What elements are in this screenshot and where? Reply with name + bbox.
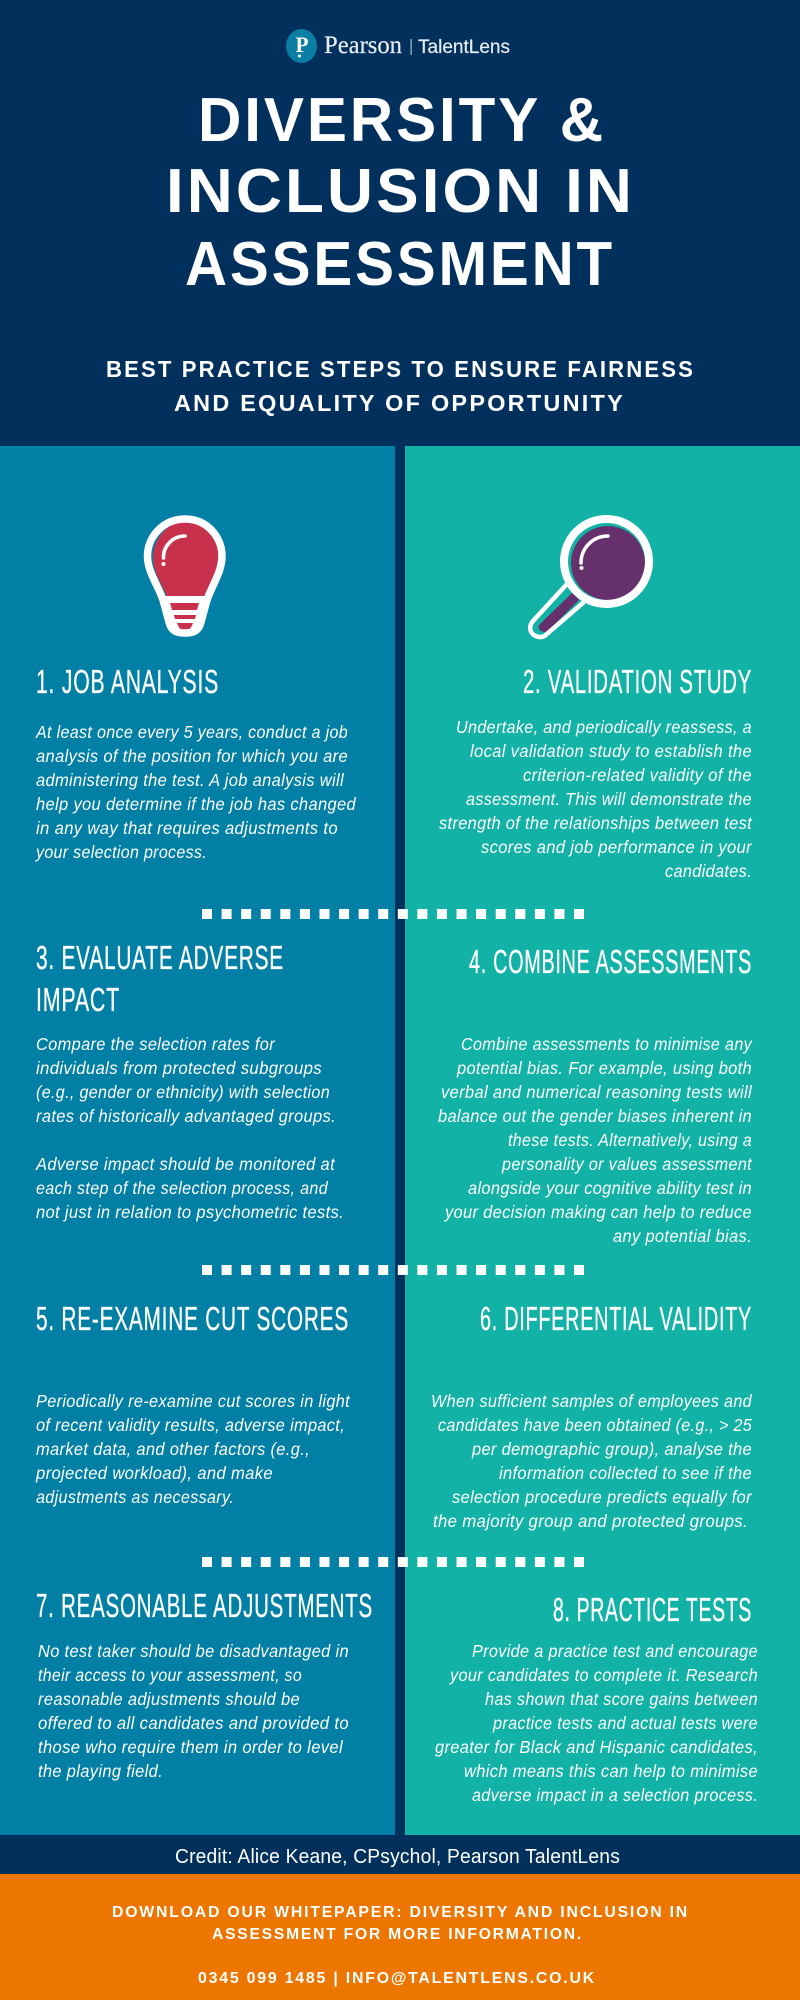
heading: 1. JOB ANALYSIS	[36, 664, 219, 701]
text block: each step of the selection process, and	[36, 1178, 329, 1198]
text block: potential bias. For example, using both	[456, 1058, 752, 1078]
text block: scores and job performance in your	[481, 837, 753, 857]
text block	[435, 1641, 758, 1805]
text block: strength of the relationships between test	[439, 813, 753, 833]
text block: local validation study to establish the	[470, 741, 752, 761]
step 8: practice tests	[435, 1592, 758, 1805]
text block: projected workload), and make	[35, 1463, 273, 1483]
text block: has shown that score gains between	[485, 1689, 758, 1709]
text block: criterion-related validity of the	[523, 765, 752, 785]
text block: assessment. This will demonstrate the	[466, 789, 752, 809]
text block: Compare the selection rates for	[36, 1034, 276, 1054]
logo wordmark: TalentLens: TalentLens	[418, 37, 510, 58]
text block	[35, 722, 357, 862]
text block: offered to all candidates and provided to	[38, 1713, 349, 1733]
heading	[36, 940, 284, 1019]
whitepaper call to action: ASSESSMENT FOR MORE INFORMATION.	[212, 1926, 583, 1943]
text block: in any way that requires adjustments to	[36, 818, 338, 838]
whitepaper call to action	[112, 1904, 689, 1943]
whitepaper call to action: DOWNLOAD OUR WHITEPAPER: DIVERSITY AND INCLUSION IN	[112, 1904, 689, 1921]
text block: verbal and numerical reasoning tests will	[441, 1082, 753, 1102]
subtitle: AND EQUALITY OF OPPORTUNITY	[174, 390, 625, 416]
text block: those who require them in order to level	[38, 1737, 344, 1757]
step 2: validation study	[439, 664, 753, 881]
text block	[38, 1641, 349, 1781]
heading: 7. REASONABLE ADJUSTMENTS	[36, 1588, 373, 1625]
text block: greater for Black and Hispanic candidates,	[435, 1737, 758, 1757]
panel: right teal column	[405, 446, 800, 1835]
text block: information collected to see if the	[499, 1463, 752, 1483]
heading: 5. RE-EXAMINE CUT SCORES	[36, 1301, 349, 1338]
text block: the majority group and protected groups.	[433, 1511, 748, 1531]
text block: candidates.	[665, 861, 752, 881]
text block: adverse impact in a selection process.	[472, 1785, 758, 1805]
text block	[431, 1391, 753, 1531]
text block: administering the test. A job analysis will	[36, 770, 345, 790]
text block: of recent validity results, adverse impact,	[36, 1415, 345, 1435]
text block: per demographic group), analyse the	[471, 1439, 752, 1459]
text block: their access to your assessment, so	[38, 1665, 302, 1685]
icon: Pearson P badge	[286, 29, 317, 63]
step 4: combine assessments	[438, 944, 753, 1246]
step 5: re-examine cut scores	[35, 1301, 351, 1507]
icon: magnifying glass	[530, 519, 649, 637]
contact details: 0345 099 1485 | INFO@TALENTLENS.CO.UK	[198, 1970, 596, 1987]
text block: these tests. Alternatively, using a	[508, 1130, 752, 1150]
text block: alongside your cognitive ability test in	[468, 1178, 752, 1198]
step 3: evaluate adverse impact	[35, 940, 344, 1222]
step 6: differential validity	[431, 1301, 753, 1531]
icon: light bulb	[148, 519, 222, 633]
text block: selection procedure predicts equally for	[452, 1487, 753, 1507]
text block: rates of historically advantaged groups.	[36, 1106, 336, 1126]
text block: adjustments as necessary.	[36, 1487, 234, 1507]
text block: analysis of the position for which you are	[36, 746, 348, 766]
title	[166, 86, 635, 299]
text block: Provide a practice test and encourage	[472, 1641, 758, 1661]
text block	[35, 1034, 344, 1222]
subtitle	[106, 356, 695, 416]
heading: 3. EVALUATE ADVERSE	[36, 940, 284, 977]
logo wordmark: Pearson: Pearson	[324, 32, 402, 59]
text block: market data, and other factors (e.g.,	[36, 1439, 310, 1459]
text block: help you determine if the job has changed	[36, 794, 357, 814]
text block: No test taker should be disadvantaged in	[38, 1641, 349, 1661]
title: INCLUSION IN	[166, 157, 635, 226]
text block: practice tests and actual tests were	[492, 1713, 758, 1733]
text block	[35, 1391, 351, 1507]
text block: your decision making can help to reduce	[444, 1202, 752, 1222]
text block: (e.g., gender or ethnicity) with selection	[36, 1082, 330, 1102]
text block: your selection process.	[35, 842, 207, 862]
text block: any potential bias.	[613, 1226, 752, 1246]
text block: Periodically re-examine cut scores in light	[36, 1391, 351, 1411]
credit line: Credit: Alice Keane, CPsychol, Pearson TalentLens	[175, 1846, 620, 1868]
text block: Combine assessments to minimise any	[461, 1034, 753, 1054]
text block: When sufficient samples of employees and	[431, 1391, 753, 1411]
text block: Adverse impact should be monitored at	[35, 1154, 336, 1174]
subtitle: BEST PRACTICE STEPS TO ENSURE FAIRNESS	[106, 356, 695, 382]
text block: Undertake, and periodically reassess, a	[456, 717, 752, 737]
heading: IMPACT	[36, 982, 120, 1019]
text block: the playing field.	[38, 1761, 163, 1781]
text block	[438, 1034, 753, 1246]
step 7: reasonable adjustments	[36, 1588, 373, 1781]
title: DIVERSITY &	[198, 86, 606, 155]
text block: personality or values assessment	[501, 1154, 753, 1174]
text block: individuals from protected subgroups	[36, 1058, 322, 1078]
footer call to action panel	[0, 1874, 800, 2000]
text block: candidates have been obtained (e.g., > 25	[438, 1415, 752, 1435]
text block: which means this can help to minimise	[464, 1761, 758, 1781]
text block: not just in relation to psychometric tests.	[36, 1202, 344, 1222]
panel: left blue column	[0, 446, 395, 1835]
text block: reasonable adjustments should be	[38, 1689, 300, 1709]
text block: balance out the gender biases inherent in	[438, 1106, 752, 1126]
text block	[439, 717, 753, 881]
step 1: job analysis	[35, 664, 357, 862]
text block: At least once every 5 years, conduct a job	[35, 722, 348, 742]
text block: your candidates to complete it. Research	[449, 1665, 758, 1685]
title: ASSESSMENT	[185, 230, 615, 299]
icon: Pearson P badge: P	[296, 32, 308, 57]
header logo: Pearson TalentLens	[286, 29, 510, 63]
